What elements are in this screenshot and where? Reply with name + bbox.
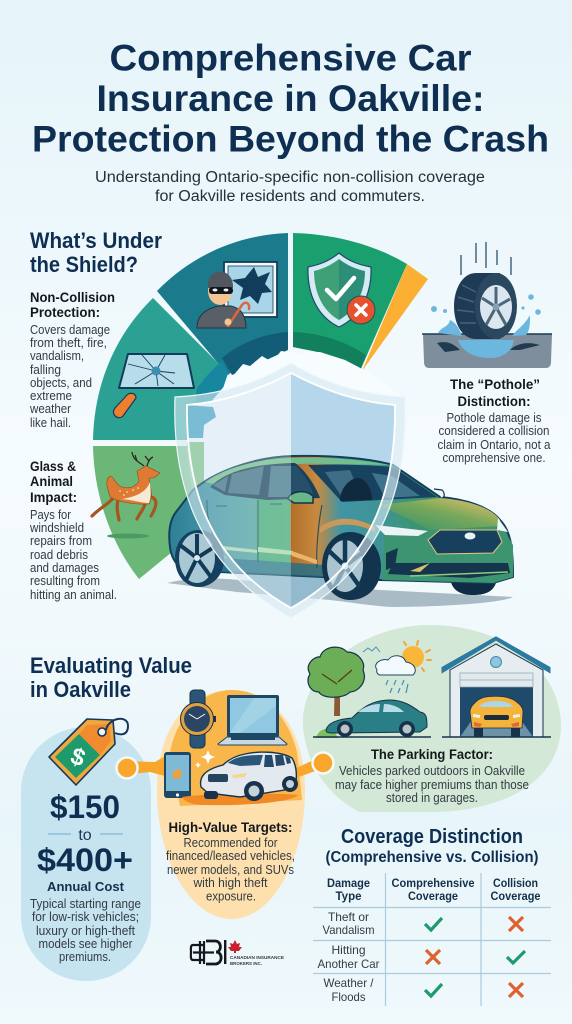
fan segment: animal — [93, 446, 205, 579]
heading: coverage distinction: (Comprehensive vs. Collision) — [326, 849, 538, 866]
fan segment: orange edge — [362, 264, 428, 371]
logo: Canadian Insurance Brokers: CANADIAN INSURANCE — [230, 955, 284, 960]
row: hitting another car: Another Car — [318, 957, 380, 971]
icon: price tag: $ — [67, 742, 89, 773]
text block: annual cost description — [30, 897, 141, 964]
car: bumper — [388, 563, 510, 578]
car: front fascia — [382, 526, 513, 583]
connector: blue to orange — [116, 752, 172, 778]
text block: parking factor: The Parking Factor: — [371, 747, 493, 762]
row: weather and floods: Weather / — [324, 976, 374, 990]
car: headlight — [375, 525, 428, 536]
table header: Damage — [327, 878, 370, 890]
text block: high-value targets: exposure. — [206, 890, 256, 904]
heading: coverage distinction — [326, 826, 538, 866]
car: front wheel — [322, 532, 381, 600]
stat: price range: to — [78, 827, 92, 844]
car — [169, 456, 513, 600]
subtitle: Understanding Ontario-specific non-collision coverage — [95, 169, 485, 186]
heading: evaluating value: Evaluating Value — [30, 653, 192, 678]
panel: coverage fan — [92, 233, 428, 579]
icon: phone — [164, 752, 191, 798]
car: rear wheel — [175, 530, 224, 587]
text block: non-collision protection: from theft, fire, — [30, 336, 107, 350]
table header: Comprehensive — [392, 878, 474, 890]
text block: glass and animal impact: hitting an animal. — [30, 588, 117, 602]
text block: annual cost description: for low-risk vehicles; — [32, 910, 139, 924]
text block: high-value targets: financed/leased vehicles, — [166, 849, 295, 863]
table: coverage comparison — [313, 873, 551, 1006]
title: Protection Beyond the Crash — [32, 118, 549, 160]
table header: Collision — [493, 878, 538, 890]
text block: non-collision protection: Protection: — [30, 305, 100, 320]
logo: Canadian Insurance Brokers: BROKERS INC. — [230, 961, 262, 966]
text block: parking factor — [335, 747, 529, 805]
text block: pothole distinction: Distinction: — [458, 393, 530, 409]
text block: high-value targets: newer models, and SUVs — [167, 863, 294, 877]
text block: non-collision protection: like hail. — [30, 416, 71, 430]
row: hitting another car — [318, 943, 525, 971]
text block: pothole distinction: comprehensive one. — [442, 451, 546, 465]
subtitle: for Oakville residents and commuters. — [155, 188, 425, 205]
text block: pothole distinction: The “Pothole” — [450, 376, 540, 392]
text block: pothole distinction: Pothole damage is — [446, 411, 542, 425]
title: Insurance in Oakville: — [96, 78, 484, 119]
car: body stripes — [223, 546, 293, 555]
panel: blue annual cost — [21, 727, 151, 981]
text block: glass and animal impact — [29, 459, 117, 602]
connector: orange to green — [292, 752, 334, 778]
heading: what's under the shield: the Shield? — [30, 252, 138, 277]
table header: Type — [336, 891, 362, 903]
car shadow — [167, 574, 513, 607]
heading: evaluating value: in Oakville — [30, 677, 131, 702]
icon: orange tag — [113, 393, 136, 418]
icon: cracked windshield — [119, 354, 194, 388]
text block: non-collision protection: falling — [30, 363, 61, 377]
car: lower rocker — [220, 558, 325, 577]
icon: deer — [92, 452, 160, 538]
text block: glass and animal impact: resulting from — [30, 574, 100, 588]
fan segment: shield — [293, 233, 407, 371]
row: theft or vandalism: Theft or — [328, 910, 369, 924]
text block: annual cost description: Typical starting range — [30, 897, 141, 911]
text block: glass and animal impact: Animal — [30, 474, 73, 489]
text block: non-collision protection: Covers damage — [30, 323, 110, 337]
row: theft or vandalism: Vandalism — [322, 923, 374, 937]
icon: tire in pothole — [422, 242, 552, 368]
table header — [327, 878, 540, 903]
car: hood — [378, 498, 500, 530]
heading: coverage distinction: Coverage Distinction — [341, 826, 523, 848]
panel: green parking factor — [303, 625, 561, 812]
stat: price range: Annual Cost — [47, 879, 125, 894]
subtitle — [95, 169, 485, 205]
text block: glass and animal impact: Glass & — [30, 459, 76, 474]
text block: pothole distinction: considered a collision — [438, 424, 550, 438]
icon: price tag — [49, 719, 128, 785]
row: theft or vandalism — [322, 910, 523, 937]
car: grille — [428, 530, 502, 554]
text block: pothole distinction — [438, 376, 551, 465]
fan segment: glass — [93, 298, 228, 440]
text block: parking factor: Vehicles parked outdoors in Oakville — [339, 764, 525, 778]
heading: evaluating value — [30, 653, 192, 702]
text block: glass and animal impact: windshield — [29, 521, 84, 535]
car: roof highlight — [205, 458, 390, 484]
icon: watch — [180, 690, 216, 748]
text block: non-collision protection — [29, 290, 115, 430]
text block: annual cost description: models see higher — [38, 937, 132, 951]
table header: Coverage — [490, 891, 540, 903]
text block: glass and animal impact: road debris — [30, 548, 88, 562]
table header: Coverage — [408, 891, 458, 903]
panel: orange high-value targets — [157, 690, 305, 919]
logo: Canadian Insurance Brokers — [191, 940, 284, 966]
title: Comprehensive Car — [110, 38, 472, 78]
text block: non-collision protection: weather — [29, 402, 71, 416]
title — [32, 38, 549, 160]
stat: price range: $150 — [50, 789, 120, 825]
stat: price range: $400+ — [37, 842, 133, 878]
row: weather and floods — [324, 976, 523, 1004]
text block: glass and animal impact: and damages — [30, 561, 99, 575]
text block: non-collision protection: objects, and — [30, 376, 92, 390]
car: mirrors — [288, 492, 313, 503]
text block: parking factor: may face higher premiums than those — [335, 778, 529, 792]
text block: pothole distinction: claim in Ontario, not a — [438, 438, 551, 452]
text block: high-value targets: Recommended for — [184, 836, 278, 850]
shield back fill — [187, 373, 395, 608]
car: windows — [210, 463, 437, 502]
car: far wheel — [450, 575, 497, 595]
icon: thief at broken window — [197, 262, 277, 328]
icon: SUV — [182, 752, 298, 805]
car: body — [169, 456, 513, 583]
row: hitting another car: Hitting — [332, 943, 366, 957]
icon: tree, weather and parked car — [308, 641, 431, 738]
text block: parking factor: stored in garages. — [386, 791, 478, 805]
icon: shield with check and cross — [308, 253, 375, 327]
text block: non-collision protection: vandalism, — [30, 349, 84, 363]
text block: glass and animal impact: repairs from — [30, 534, 92, 548]
row: weather and floods: Floods — [332, 990, 366, 1004]
text block: non-collision protection: Non-Collision — [30, 290, 115, 305]
fan segment: theft — [157, 233, 288, 375]
heading: what's under the shield — [30, 228, 162, 277]
stat: price range — [37, 789, 133, 894]
white burst behind shield — [203, 351, 405, 440]
text block: non-collision protection: extreme — [30, 389, 72, 403]
text block: high-value targets — [166, 820, 295, 904]
text block: glass and animal impact: Pays for — [30, 508, 71, 522]
icon: garage with yellow car — [442, 638, 551, 737]
text block: annual cost description: luxury or high-theft — [36, 924, 135, 938]
text block: high-value targets: High-Value Targets: — [168, 820, 292, 835]
text block: glass and animal impact: Impact: — [30, 490, 77, 505]
icon: laptop — [218, 695, 287, 745]
car: door lines — [207, 500, 322, 568]
icon: sparkles — [195, 750, 215, 768]
shield overlay — [175, 363, 405, 618]
text block: annual cost description: premiums. — [59, 950, 111, 964]
heading: what's under the shield: What’s Under — [30, 228, 162, 253]
text block: high-value targets: with high theft — [193, 876, 268, 890]
